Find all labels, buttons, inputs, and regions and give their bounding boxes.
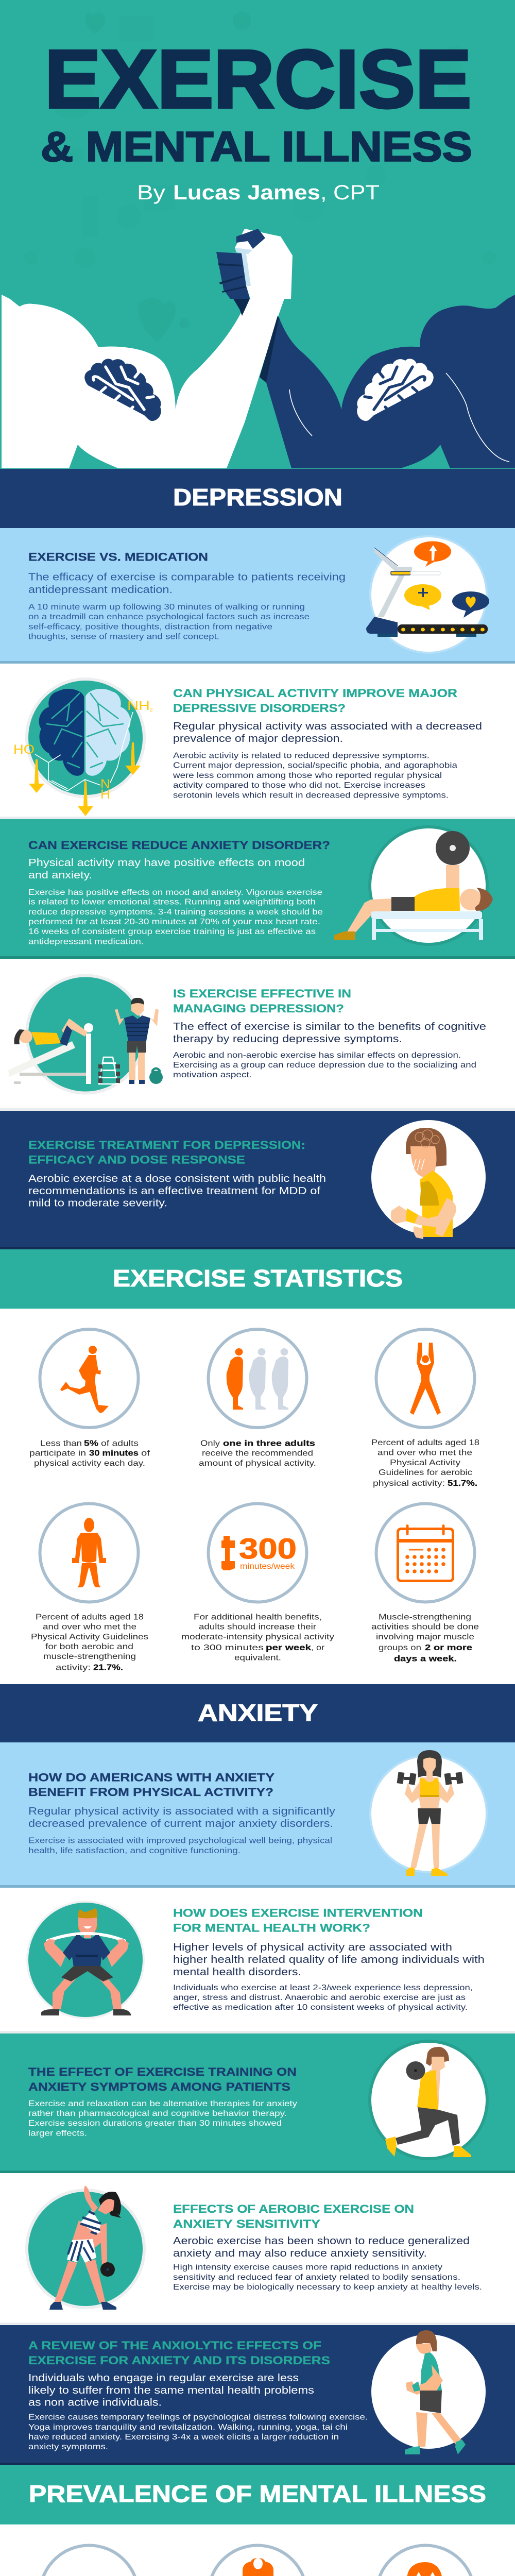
icon: serotonin brain [13, 677, 153, 816]
stat: muscle strengthening [371, 1503, 479, 1663]
body text: A 10 minute warm up following 30 minutes of walking or running [28, 603, 305, 612]
heading band: exercise statistics: EXERCISE STATISTICS [113, 1265, 403, 1292]
icon: orange speech bubble with arrow [414, 541, 451, 567]
stat: 21.7 percent: for both aerobic and [45, 1642, 133, 1651]
icon: man with dumbbells [40, 1503, 138, 1602]
stat: 21.7 percent [31, 1503, 148, 1672]
stat: one in three: amount of physical activity. [199, 1459, 316, 1468]
body text: Exercise session durations greater than 30 minutes showed [28, 2119, 282, 2128]
caption: of adults [101, 1439, 139, 1448]
icon: 300 minutes per week: minutes/week [240, 1562, 295, 1571]
body text: is related to lower emotional stress. Running and weightlifting both [28, 897, 316, 907]
heading: EXERCISE TREATMENT FOR DEPRESSION: [28, 1139, 305, 1151]
heading: EFFECTS OF AEROBIC EXERCISE ON [173, 2202, 414, 2215]
caption: one in three adults [223, 1439, 315, 1448]
body text: Individuals who exercise at least 2-3/week experience less depression, [173, 1984, 473, 1992]
icon: 300 minutes per week: 300 [239, 1532, 297, 1565]
panel: how do americans with anxiety benefit [0, 1742, 515, 1888]
body text: thoughts, sense of mastery and self concept. [28, 633, 219, 641]
panel: is exercise effective [0, 959, 515, 1111]
heading band: depression [0, 469, 515, 528]
lead text: Aerobic exercise at a dose consistent with public health [28, 1173, 326, 1184]
stat: 21.7 percent: and over who met the [43, 1623, 136, 1631]
icon: woman running [371, 2330, 486, 2454]
stat: muscle strengthening: activities should be done [371, 1623, 479, 1631]
lead text: as non active individuals. [28, 2397, 162, 2408]
stat: 21.7 percent: Physical Activity Guidelines [31, 1633, 148, 1641]
icon: 300 minutes per week [208, 1503, 307, 1602]
icon: two figures working out [8, 974, 163, 1094]
dumbbells [397, 1772, 463, 1785]
body text: Exercise has positive effects on mood and anxiety. Vigorous exercise [28, 888, 322, 897]
heading: EXERCISE VS. MEDICATION [28, 550, 208, 564]
icon: brain on white arm [84, 359, 161, 421]
body text: activity compared to those who did not. Exercise increases [173, 781, 425, 790]
caption: 5% [84, 1439, 98, 1448]
lead text: likely to suffer from the same mental health problems [28, 2384, 314, 2396]
stat: 1 in 5 adults [28, 2545, 151, 2576]
panel: hero [0, 0, 515, 469]
icon: standing figure [208, 2545, 307, 2576]
body text: Current major depression, social/specific phobia, and agoraphobia [173, 761, 457, 770]
byline: By [137, 181, 165, 204]
body text [173, 2263, 482, 2292]
stat: less than 5 percent: physical activity each day. [34, 1459, 145, 1468]
stat: muscle strengthening: 2 or more [425, 1643, 472, 1652]
body text [173, 751, 457, 800]
stat: 6.9 percent [197, 2545, 318, 2576]
body text: health, life satisfaction, and cognitive functioning. [28, 1846, 241, 1855]
caption: Only [200, 1439, 220, 1448]
heading: ANXIETY SENSITIVITY [173, 2217, 320, 2230]
body text: Exercise causes temporary feelings of psychological distress following exercise. [28, 2413, 368, 2421]
body text: rather than pharmacological and cognitive behavior therapy. [28, 2109, 287, 2118]
body text: larger effects. [28, 2129, 87, 2138]
lead text [173, 720, 482, 744]
lead text [28, 2372, 314, 2408]
stat: 300 minutes [181, 1503, 334, 1662]
body text: antidepressant medication. [28, 938, 144, 946]
heading [28, 1139, 305, 1166]
heading: CAN EXERCISE REDUCE ANXIETY DISORDER? [28, 839, 330, 852]
heading: EFFICACY AND DOSE RESPONSE [28, 1153, 245, 1166]
lead text [28, 571, 346, 596]
panel: can exercise reduce anxiety disorder [0, 819, 515, 959]
byline: Lucas James [173, 181, 320, 204]
body text: self-efficacy, positive thoughts, distraction from negative [28, 622, 272, 632]
caption: Less than [40, 1439, 82, 1448]
stat: muscle strengthening: involving major muscle [376, 1633, 474, 1641]
body text: Exercise may be biologically necessary to keep anxiety at healthy levels. [173, 2283, 482, 2292]
heading band: prevalence of mental illness: PREVALENCE OF MENTAL ILLNESS [29, 2480, 486, 2507]
body text: on a treadmill can enhance psychological factors such as increase [28, 613, 310, 621]
lead text: prevalence of major depression. [173, 733, 343, 744]
body text: motivation aspect. [173, 1071, 252, 1079]
icon: woman with dumbbells [369, 1750, 488, 1876]
heading: FOR MENTAL HEALTH WORK? [173, 1922, 370, 1934]
icon: five people [40, 2545, 138, 2576]
stat: less than 5 percent: of [141, 1449, 150, 1458]
heading [173, 687, 457, 715]
stat: less than 5 percent: 30 minutes [89, 1449, 139, 1458]
icon: runner [40, 1329, 138, 1428]
stat: muscle strengthening: groups on [379, 1643, 421, 1652]
stat: 21.7 percent: muscle-strengthening [43, 1652, 136, 1661]
lead text: Regular physical activity was associated with a decreased [173, 720, 482, 732]
stat: 300 minutes: per week [266, 1643, 311, 1652]
body text: were less common among those who reported regular physical [173, 771, 442, 780]
body text: High intensity exercise causes more rapid reductions in anxiety [173, 2263, 442, 2272]
dumbbell rack [98, 1057, 120, 1084]
body text [28, 888, 323, 946]
heading: HOW DOES EXERCISE INTERVENTION [173, 1906, 423, 1920]
icon: head with drops [376, 2545, 475, 2576]
heading: BENEFIT FROM PHYSICAL ACTIVITY? [28, 1786, 273, 1799]
stat: 51.7 percent: Physical Activity [390, 1459, 460, 1467]
labels NH2, HO, NH [13, 699, 153, 802]
body text: Exercising as a group can reduce depression due to the socializing and [173, 1061, 476, 1070]
stat: 51.7 percent: 51.7%. [448, 1479, 477, 1488]
icon: yellow speech bubble with plus [404, 584, 441, 610]
lead text: mild to moderate severity. [28, 1197, 167, 1209]
heading: MANAGING DEPRESSION? [173, 1002, 344, 1015]
lead text: antidepressant medication. [28, 584, 173, 596]
body text: 16 weeks of consistent group exercise training is just as effective as [28, 927, 316, 936]
icon: calendar [376, 1503, 475, 1602]
heading: ANXIETY SYMPTOMS AMONG PATIENTS [28, 2080, 290, 2093]
icon: man squatting with band [26, 1901, 145, 2019]
panel: prevalence statistics [0, 2524, 515, 2576]
labels NH2, HO, NH: 2 [150, 707, 153, 713]
stat: one in three [199, 1329, 316, 1468]
lead text [173, 2235, 470, 2259]
lead text [28, 1805, 336, 1829]
stat: 300 minutes: adults should increase their [199, 1623, 317, 1631]
lying person [14, 1019, 88, 1046]
heading [28, 2065, 297, 2093]
labels NH2, HO, NH: HO [13, 742, 35, 757]
lead text [28, 1173, 326, 1209]
caption: Percent of adults aged 18 [36, 1613, 144, 1622]
body text: Exercise is associated with improved psychological well being, physical [28, 1836, 332, 1845]
heading [173, 1906, 423, 1934]
lead text [28, 857, 305, 881]
illustration: white arm with brain [2, 229, 293, 468]
arrows down [29, 742, 141, 816]
heading: A REVIEW OF THE ANXIOLYTIC EFFECTS OF [28, 2339, 321, 2352]
stat: major depressive disorder [362, 2545, 489, 2576]
stat: 300 minutes: equivalent. [234, 1654, 281, 1662]
stat: 300 minutes: to 300 minutes [191, 1643, 264, 1652]
heading: DEPRESSIVE DISORDERS? [173, 702, 346, 715]
stat: 21.7 percent: 21.7%. [93, 1663, 123, 1672]
body text [173, 1984, 473, 2012]
labels NH2, HO, NH: NH [127, 699, 150, 713]
stat: 51.7 percent: Guidelines for aerobic [379, 1468, 472, 1477]
stat: muscle strengthening: days a week. [394, 1655, 457, 1663]
lead text: The efficacy of exercise is comparable to patients receiving [28, 571, 346, 583]
heading band: anxiety: ANXIETY [198, 1699, 318, 1726]
panel: how does exercise intervention work [0, 1888, 515, 2033]
icon: brain on navy arm [357, 359, 434, 421]
stat: less than 5 percent [29, 1329, 150, 1468]
lead text: Individuals who engage in regular exercise are less [28, 2372, 299, 2384]
labels NH2, HO, NH: H [100, 787, 110, 802]
body text [28, 603, 310, 641]
hero background [0, 0, 515, 469]
lead text: Physical activity may have positive effects on mood [28, 857, 305, 869]
panel: exercise treatment for depression [0, 1111, 515, 1249]
title: & MENTAL ILLNESS [41, 124, 472, 170]
heading [28, 2339, 330, 2367]
icon: treadmill in circle [366, 535, 489, 654]
panel: can physical activity improve [0, 664, 515, 819]
heading: HOW DO AMERICANS WITH ANXIETY [28, 1771, 274, 1784]
icon: three stretching figures [208, 1329, 307, 1428]
lead text: and anxiety. [28, 869, 92, 881]
kettlebell [149, 1067, 163, 1084]
body text: Exercise and relaxation can be alternative therapies for anxiety [28, 2099, 297, 2108]
caption: Percent of adults aged 18 [371, 1438, 479, 1447]
body text: serotonin levels which result in decreased depressive symptoms. [173, 791, 449, 800]
stat: 300 minutes: , or [311, 1643, 325, 1652]
stat: 51.7 percent [371, 1329, 479, 1488]
body text: effective as medication after 10 consistent weeks of physical activity. [173, 2003, 468, 2012]
caption: For additional health benefits, [194, 1613, 322, 1622]
lead text: The effect of exercise is similar to the benefits of cognitive [173, 1021, 486, 1032]
body text: Aerobic and non-aerobic exercise has similar effects on depression. [173, 1051, 461, 1060]
icon: bench press figure [334, 825, 493, 946]
lead text: Higher levels of physical activity are associated with [173, 1941, 452, 1953]
byline: , CPT [320, 181, 380, 204]
body text: reduce depressive symptoms. 3-4 training sessions a week should be [28, 908, 323, 917]
body text: Aerobic activity is related to reduced depressive symptoms. [173, 751, 430, 760]
body text [28, 1836, 332, 1855]
stat: 21.7 percent: activity: [56, 1663, 91, 1672]
heading band: exercise statistics [0, 1249, 515, 1309]
heading band: prevalence of mental illness [0, 2465, 515, 2524]
heading: THE EFFECT OF EXERCISE TRAINING ON [28, 2065, 297, 2078]
lead text: higher health related quality of life among individuals with [173, 1954, 485, 1965]
body text: anxiety symptoms. [28, 2443, 108, 2451]
lead text: mental health disorders. [173, 1966, 301, 1978]
labels NH2, HO, NH: N [100, 777, 110, 791]
body text [173, 1051, 476, 1079]
body text: anger, stress and distrust. Anaerobic and aerobic exercise are just as [173, 1993, 466, 2002]
heading [28, 1771, 274, 1799]
lead text: Aerobic exercise has been shown to reduce generalized [173, 2235, 470, 2247]
body text: have reduced anxiety. Exercising 3-4x a week elicits a larger reduction in [28, 2433, 339, 2442]
title: EXERCISE [44, 33, 472, 125]
panel: effect of exercise training on anxiety [0, 2033, 515, 2173]
body text: sensitivity and reduced fear of anxiety related to bodily sensations. [173, 2273, 460, 2282]
stat: one in three: receive the recommended [202, 1449, 313, 1458]
icon: person with head in hand [371, 1120, 486, 1239]
stat: 300 minutes: moderate-intensity physical activity [181, 1633, 334, 1641]
illustration: navy arm with brain [233, 295, 515, 468]
caption: Muscle-strengthening [379, 1613, 471, 1622]
incline bench [8, 1023, 93, 1084]
heading: IS EXERCISE EFFECTIVE IN [173, 987, 351, 1000]
heading band: anxiety [0, 1684, 515, 1742]
heading: EXERCISE FOR ANXIETY AND ITS DISORDERS [28, 2354, 330, 2367]
lead text: recommendations is an effective treatment for MDD of [28, 1185, 320, 1197]
heading [173, 987, 351, 1015]
body text: performed for at least 20-30 minutes at 70% of your max heart rate. [28, 918, 320, 926]
lead text [173, 1021, 486, 1045]
title [41, 33, 472, 170]
icon: woman lunging with barbell [368, 2040, 489, 2160]
lead text: Regular physical activity is associated with a significantly [28, 1805, 336, 1817]
lead text [173, 1941, 485, 1978]
lead text: therapy by reducing depressive symptoms. [173, 1033, 402, 1045]
stat: 51.7 percent: physical activity: [373, 1479, 445, 1488]
heading [173, 2202, 414, 2230]
icon: star jump [376, 1329, 475, 1428]
body text [28, 2099, 297, 2138]
panel: effects of aerobic exercise [0, 2173, 515, 2325]
icon: woman side bend [25, 2185, 146, 2310]
heading: CAN PHYSICAL ACTIVITY IMPROVE MAJOR [173, 687, 457, 700]
icon: navy speech bubble with heart [452, 591, 489, 618]
panel: exercise vs medication [0, 528, 515, 664]
faint medical background icons [24, 11, 496, 407]
panel: exercise statistics [0, 1309, 515, 1684]
stat: less than 5 percent: participate in [29, 1449, 86, 1458]
heading band: depression: DEPRESSION [173, 484, 342, 511]
panel: review of anxiolytic effects [0, 2325, 515, 2465]
standing man [115, 998, 159, 1084]
lead text: anxiety and may also reduce anxiety sensitivity. [173, 2247, 427, 2259]
lead text: decreased prevalence of current major anxiety disorders. [28, 1818, 333, 1829]
stat: 51.7 percent: and over who met the [377, 1449, 472, 1457]
body text [28, 2413, 368, 2451]
body text: Yoga improves tranquility and revitalization. Walking, running, yoga, tai chi [28, 2423, 348, 2432]
